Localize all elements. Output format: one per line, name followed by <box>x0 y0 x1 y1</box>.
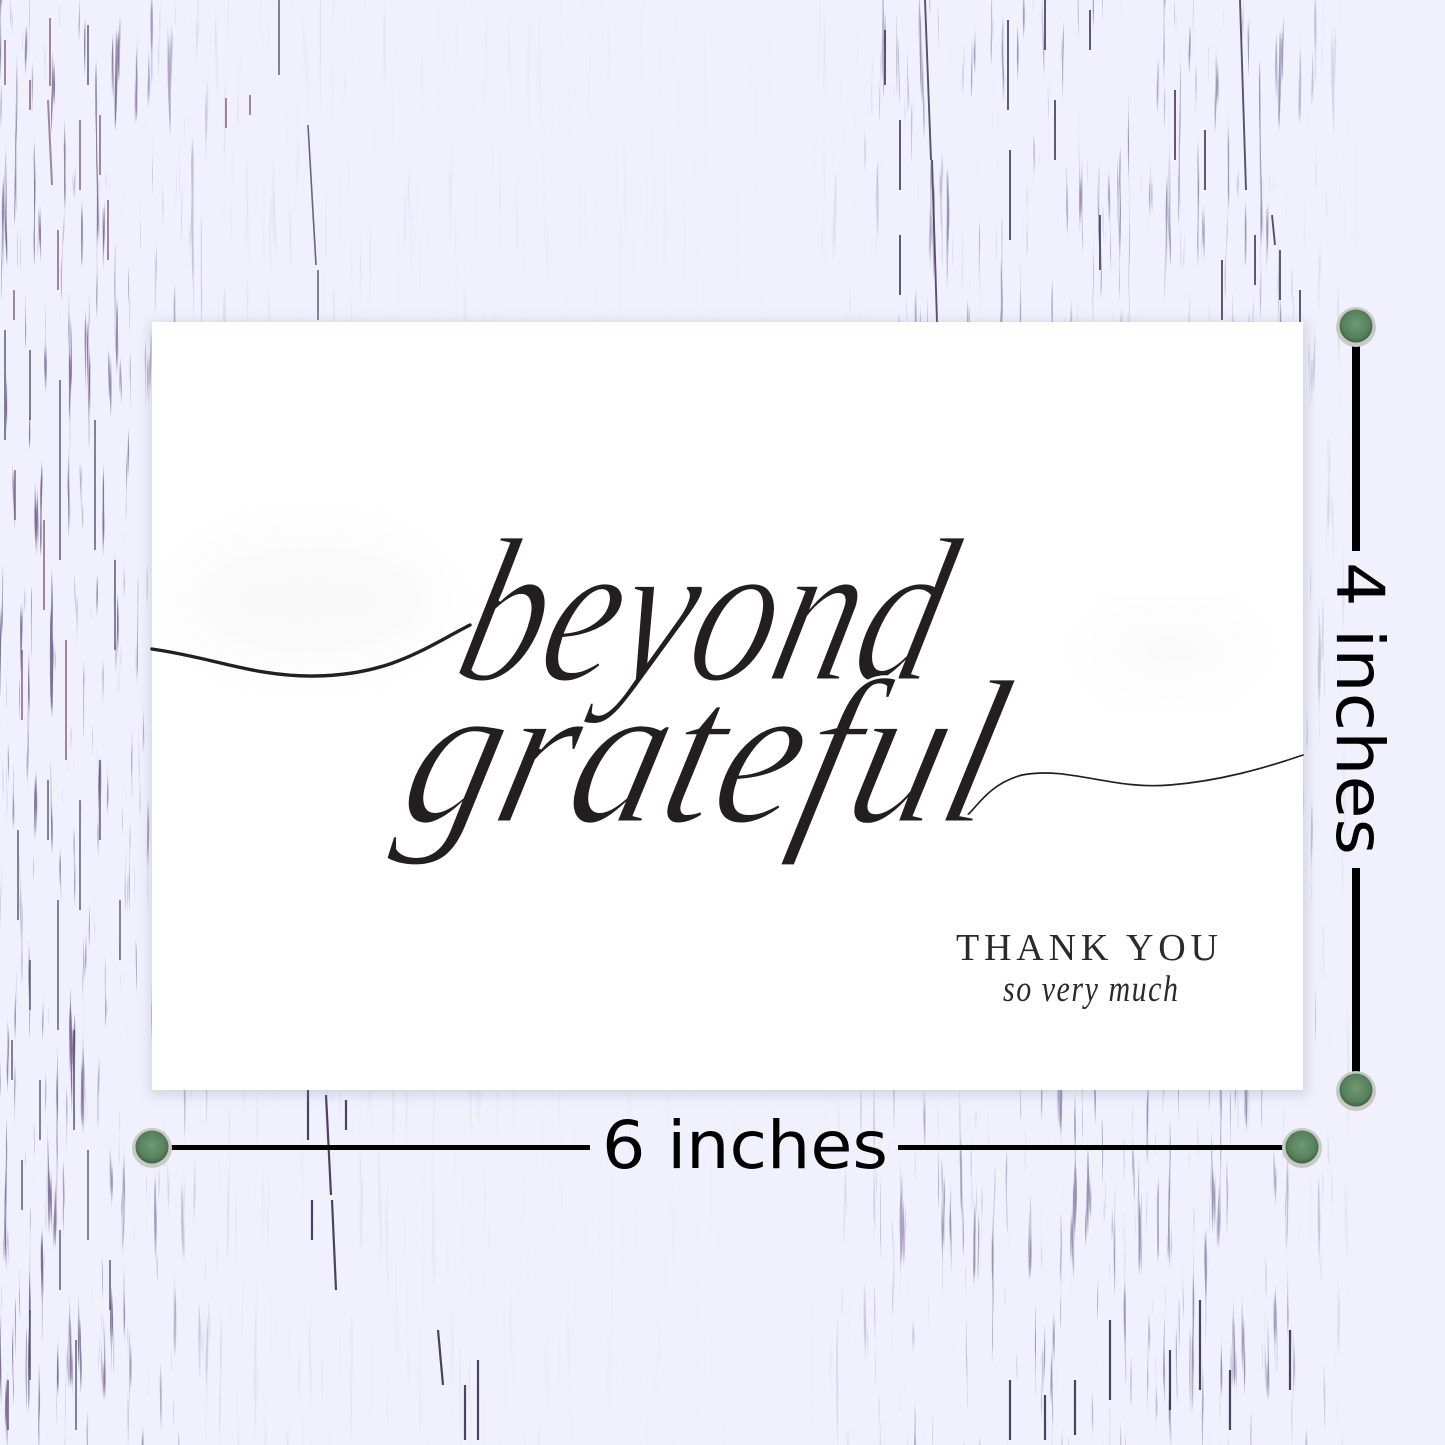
width label: 6 inches <box>602 1107 888 1184</box>
width end marker: right <box>1282 1128 1322 1168</box>
width dimension: 6 inches <box>132 1107 1322 1184</box>
height dimension: 4 inches <box>1321 307 1398 1111</box>
panel: white card <box>152 322 1303 1090</box>
text: thank you: THANK YOU <box>956 927 1218 969</box>
right swash flourish <box>960 755 1303 822</box>
text: so very much: so very much <box>1003 969 1178 1010</box>
left swash flourish <box>152 625 470 676</box>
heading: beyond: beyond <box>439 497 976 726</box>
height end marker: bottom <box>1336 1071 1376 1111</box>
height label: 4 inches <box>1321 562 1398 855</box>
card drop shadow <box>150 322 1307 1095</box>
width end marker: left <box>132 1128 172 1168</box>
height end marker: top <box>1336 307 1376 347</box>
heading: grateful: grateful <box>384 639 1031 868</box>
